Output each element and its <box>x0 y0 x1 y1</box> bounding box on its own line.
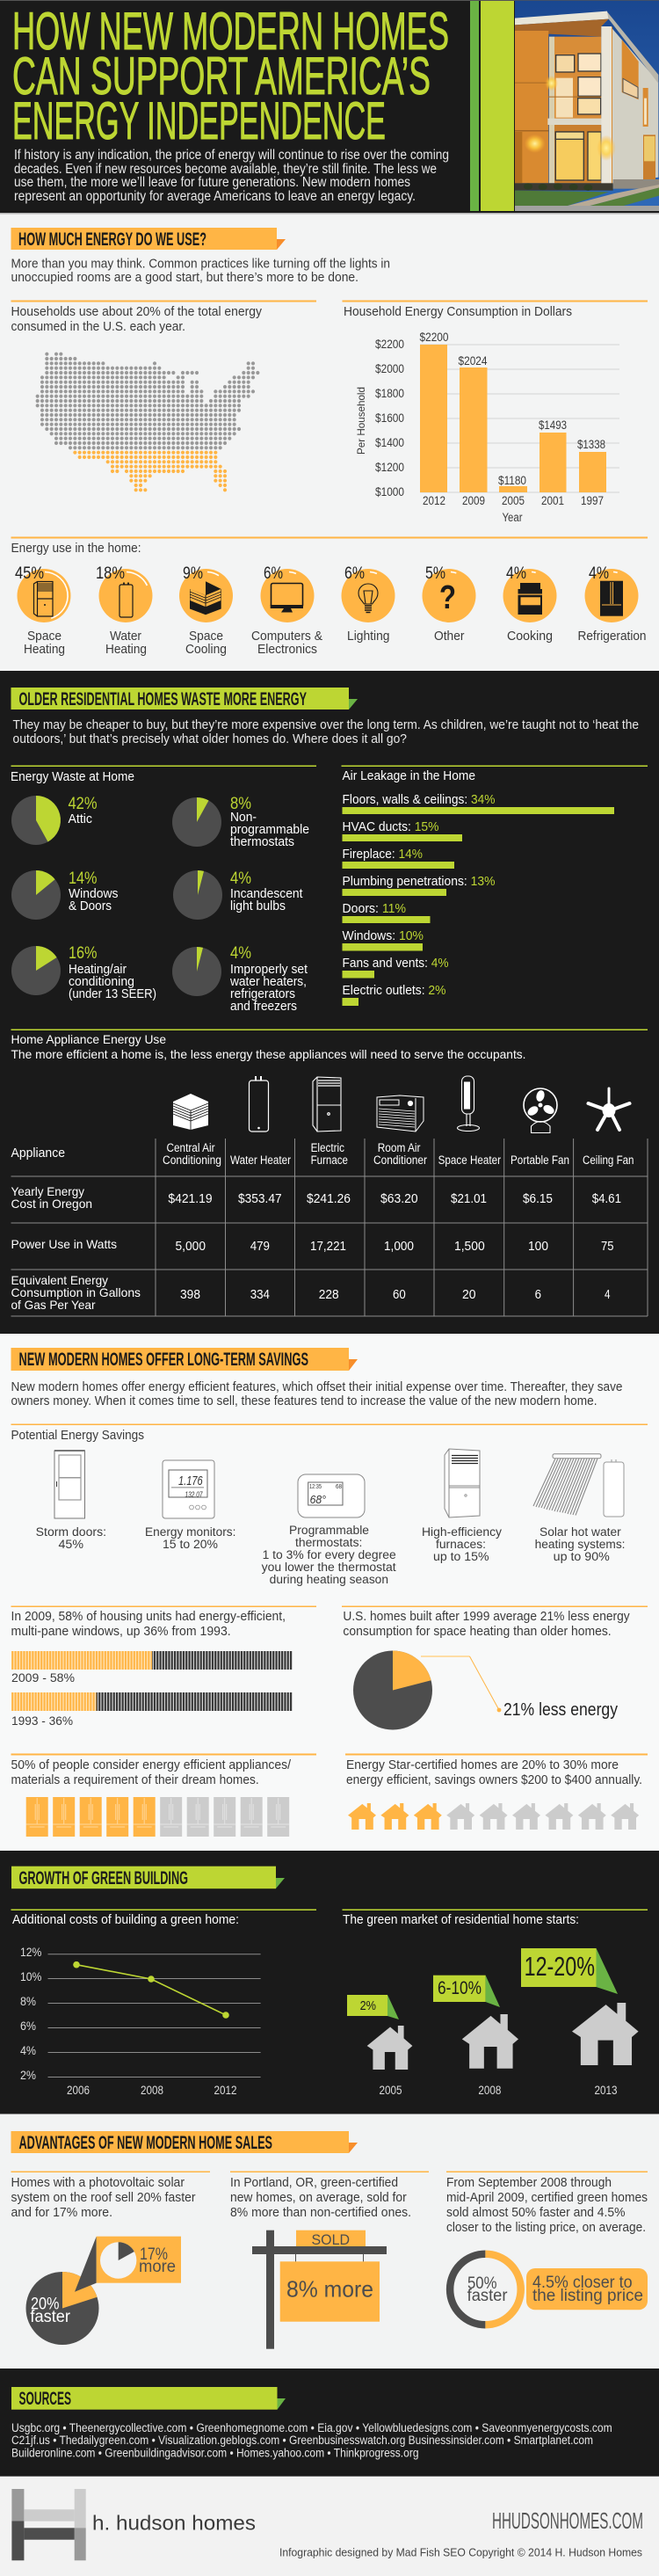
source list <box>11 2421 612 2460</box>
savings item: solar hot water heating: heating systems: <box>535 1538 626 1551</box>
bar chart: household energy consumption: $1200 <box>375 461 404 474</box>
pie: water heaters and refrigerators 4%: 4% <box>230 944 251 963</box>
pie: attic 42%: Attic <box>69 812 92 826</box>
savings item: energy monitors: 1.176 <box>178 1474 203 1488</box>
column: photovoltaic solar homes: and for 17% more. <box>11 2206 112 2220</box>
table: appliance energy use: 20 <box>462 1288 476 1302</box>
pie: thermostats 8%: programmable <box>230 823 309 837</box>
intro paragraph <box>12 718 639 746</box>
column: certified green homes: closer to the listing price, on average. <box>446 2221 646 2235</box>
energy waste pies <box>11 795 309 1014</box>
table: appliance energy use: Cost in Oregon <box>11 1197 92 1211</box>
bar chart: air leakage: Doors: 11% <box>343 902 406 916</box>
heading: air leakage in the home: Air Leakage in the Home <box>343 769 475 783</box>
bar chart: household energy consumption: Year <box>503 511 523 524</box>
item: computers and electronics 6%: 6% <box>264 564 283 583</box>
table: appliance energy use: Ceiling Fan <box>583 1153 634 1167</box>
table: appliance energy use: Water Heater <box>230 1153 291 1167</box>
item: refrigeration 4% <box>578 564 647 644</box>
house: 2005 2%: 2% <box>360 1998 376 2013</box>
bar chart: household energy consumption: 2012 <box>423 494 445 507</box>
pie: windows and doors 14%: & Doors <box>69 899 112 913</box>
table: appliance energy use: 6 <box>535 1288 541 1302</box>
bar chart: household energy consumption: $1800 <box>375 387 404 400</box>
house: 2013 12-20% <box>521 1948 639 2097</box>
savings item: programmable thermostats <box>262 1474 396 1586</box>
heading: households use <box>11 305 263 334</box>
stat: efficient windows: multi-pane windows, up 36% from 1993. <box>11 1625 231 1639</box>
bar chart: household energy consumption: $2024 <box>459 354 488 367</box>
item: refrigeration 4%: Refrigeration <box>578 629 647 644</box>
line chart: additional costs <box>20 1946 261 2097</box>
item: cooking 4%: 4% <box>506 564 526 583</box>
table: appliance energy use: 5,000 <box>176 1240 206 1254</box>
table: appliance energy use: Conditioning <box>163 1153 221 1167</box>
intro paragraph: More than you may think. Common practices like turning off the lights in <box>11 257 390 271</box>
bar chart: household energy consumption <box>355 331 619 524</box>
column: Portland green-certified homes: 8% more than non-certified ones. <box>230 2206 411 2220</box>
item: space heating 45%: 45% <box>15 564 44 583</box>
savings item: solar hot water heating: up to 90% <box>554 1550 610 1563</box>
table: appliance energy use: 100 <box>528 1240 548 1254</box>
panel: growth of green building <box>0 1851 659 2114</box>
bar chart: household energy consumption: 2009 <box>462 494 485 507</box>
table: appliance energy use: 228 <box>319 1288 339 1302</box>
logo: H mark <box>11 2489 86 2560</box>
panel: sources <box>0 2369 659 2476</box>
table: appliance energy use: 60 <box>393 1288 406 1302</box>
heading: potential energy savings: Potential Energy Savings <box>11 1429 144 1443</box>
item: other 5% <box>422 564 476 644</box>
heading: home appliance energy use: Home Appliance Energy Use <box>11 1033 166 1046</box>
column: photovoltaic solar homes: system on the roof sell 20% faster <box>11 2191 196 2205</box>
icon row: houses <box>348 1803 639 1830</box>
table: appliance energy use: Electric <box>311 1141 344 1154</box>
pie: light bulbs 4%: Incandescent <box>230 887 302 901</box>
table: appliance energy use: 4 <box>605 1288 610 1302</box>
appliance icons <box>173 1076 629 1132</box>
stat: efficient appliances <box>11 1758 292 1837</box>
stat: efficient windows: In 2009, 58% of housing units had energy-efficient, <box>11 1610 286 1624</box>
item: water heating 18%: Heating <box>105 643 147 657</box>
heading: home appliance energy use <box>11 1033 525 1061</box>
house: 2005 2%: 2005 <box>380 2084 402 2097</box>
bar chart: air leakage <box>343 793 614 1006</box>
intro paragraph: owners money. When it comes time to sell, these features tend to increase the value of the new modern home. <box>11 1394 597 1408</box>
line chart: additional costs: 4% <box>20 2044 36 2057</box>
energy use icons row <box>15 564 647 657</box>
heading: households use: Households use about 20% of the total energy <box>11 305 263 319</box>
column: certified green homes <box>446 2176 648 2325</box>
bar chart: household energy consumption: $1000 <box>375 485 404 498</box>
item: water heating 18% <box>96 564 153 657</box>
pie: heating and air conditioning 16%: (under 13 SEER) <box>69 987 156 1001</box>
savings item: solar hot water heating: Solar hot water <box>540 1525 621 1539</box>
savings item: programmable thermostats: Programmable <box>289 1524 369 1537</box>
icon: ceiling fan <box>589 1088 629 1130</box>
table: appliance energy use: Yearly Energy <box>11 1184 84 1198</box>
heading: households use: consumed in the U.S. each year. <box>11 320 185 334</box>
pie: heating and air conditioning 16%: Heating/air <box>69 963 127 977</box>
pie callout: 20% faster, 17% more <box>26 2237 181 2345</box>
table: appliance energy use: Portable Fan <box>511 1153 569 1167</box>
stat: efficient windows: 2009 - 58% <box>11 1671 75 1685</box>
callout: 4.5% closer to the listing price <box>526 2268 648 2310</box>
pie: light bulbs 4% <box>173 870 302 920</box>
savings item: programmable thermostats: 68 <box>336 1484 342 1490</box>
table: appliance energy use: $421.19 <box>168 1192 213 1206</box>
item: space heating 45%: Heating <box>24 643 65 657</box>
intro paragraph: They may be cheaper to buy, but they’re more expensive over the long term. As children, we’re taught not to ‘heat the <box>12 718 639 732</box>
section banner: sources <box>11 2387 286 2410</box>
stat: 21% less energy: 21% less energy <box>503 1700 618 1720</box>
item: computers and electronics 6% <box>251 564 322 657</box>
pie: heating and air conditioning 16%: 16% <box>69 944 98 963</box>
pie: light bulbs 4%: 4% <box>230 870 251 888</box>
heading: home appliance energy use: The more efficient a home is, the less energy these appliances will need to serve the occupants. <box>11 1047 525 1061</box>
column: Portland green-certified homes: In Portland, OR, green-certified <box>230 2176 398 2190</box>
panel: long-term savings <box>0 1334 659 1851</box>
house: 2008 6-10%: 2008 <box>478 2084 501 2097</box>
house: 2008 6-10%: 6-10% <box>438 1978 482 1998</box>
sold sign <box>252 2230 387 2349</box>
bar chart: household energy consumption: $1338 <box>577 438 605 451</box>
savings item: programmable thermostats: 68° <box>310 1493 326 1506</box>
line chart: additional costs: 10% <box>20 1970 41 1983</box>
item: space heating 45%: Space <box>27 629 62 644</box>
savings item: programmable thermostats: thermostats: <box>295 1536 362 1549</box>
table: appliance energy use: $353.47 <box>238 1192 282 1206</box>
pie: water heaters and refrigerators 4%: water heaters, <box>229 975 307 989</box>
sold sign: SOLD <box>311 2231 350 2248</box>
table: appliance energy use: $21.01 <box>451 1192 487 1206</box>
pie: thermostats 8%: thermostats <box>230 835 294 849</box>
bar chart: air leakage: Plumbing penetrations: 13% <box>343 875 496 889</box>
savings item: programmable thermostats: 12:35 <box>309 1484 322 1490</box>
green market houses <box>347 1948 639 2097</box>
table: appliance energy use: $241.26 <box>307 1192 351 1206</box>
stat: energy star homes: Energy Star-certified homes are 20% to 30% more <box>346 1758 619 1772</box>
table: appliance energy use: Conditioner <box>373 1153 427 1167</box>
bar chart: household energy consumption: 1997 <box>581 494 604 507</box>
house: 2013 12-20%: 2013 <box>594 2084 617 2097</box>
panel: footer <box>0 2476 659 2576</box>
table: appliance energy use <box>11 1139 648 1316</box>
stat: 21% less energy: consumption for space heating than older homes. <box>343 1625 612 1639</box>
item: other 5%: ? <box>439 579 456 616</box>
pie: water heaters and refrigerators 4%: and freezers <box>230 1000 297 1014</box>
icon: space heater <box>457 1076 480 1131</box>
column: photovoltaic solar homes: Homes with a photovoltaic solar <box>11 2176 185 2190</box>
line chart: additional costs: 8% <box>20 1995 36 2008</box>
intro text: If history is any indication, the price of energy will continue to rise over the coming <box>14 148 449 163</box>
title <box>12 2 449 150</box>
pie: windows and doors 14%: Windows <box>69 887 118 901</box>
item: lighting 6% <box>341 564 395 644</box>
intro text: decades. Even if new resources become available, they’re still finite. The less we <box>14 162 437 177</box>
pie: thermostats 8%: Non- <box>230 811 257 825</box>
icon: portable fan <box>524 1088 557 1132</box>
item: computers and electronics 6%: Electronics <box>257 643 317 657</box>
intro text <box>14 148 449 204</box>
bar chart: air leakage: Windows: 10% <box>343 929 424 943</box>
table: appliance energy use: 1,500 <box>454 1240 485 1254</box>
stat: energy star homes: energy efficient, savings owners $200 to $400 annually. <box>346 1773 642 1787</box>
intro paragraph: outdoors,’ but that’s precisely what older homes do. Where does it all go? <box>12 732 407 746</box>
savings item: programmable thermostats: you lower the thermostat <box>262 1561 396 1574</box>
table: appliance energy use: 17,221 <box>310 1240 346 1254</box>
title: ENERGY INDEPENDENCE <box>12 91 386 150</box>
table: appliance energy use: Space Heater <box>438 1153 501 1167</box>
intro paragraph <box>11 257 390 285</box>
bar chart: household energy consumption: 2001 <box>541 494 564 507</box>
item: other 5%: Other <box>434 629 465 644</box>
section banner: advantages: ADVANTAGES OF NEW MODERN HOME SALES <box>19 2132 272 2153</box>
savings item: storm doors: 45% <box>58 1538 83 1551</box>
section banner: green building: GROWTH OF GREEN BUILDING <box>19 1867 188 1888</box>
logo wordmark: h. hudson homes <box>92 2512 256 2535</box>
table: appliance energy use: 398 <box>180 1288 200 1302</box>
callout: 4.5% closer to the listing price: the listing price <box>532 2287 643 2305</box>
section banner: long-term savings: NEW MODERN HOMES OFFER LONG-TERM SAVINGS <box>19 1349 308 1370</box>
heading: energy waste at home: Energy Waste at Home <box>11 770 134 784</box>
savings item: programmable thermostats: 1 to 3% for every degree <box>263 1548 396 1561</box>
stat: efficient appliances: materials a requirement of their dream homes. <box>11 1773 259 1787</box>
icon: room air conditioner <box>377 1095 424 1132</box>
line chart: additional costs: 2% <box>20 2069 36 2082</box>
bar chart: household energy consumption: $2200 <box>420 331 448 344</box>
bar chart: household energy consumption: $1600 <box>375 411 404 425</box>
pie: light bulbs 4%: light bulbs <box>230 899 286 913</box>
item: cooking 4%: Cooking <box>507 629 553 644</box>
ring chart: 50% faster: 50% <box>467 2274 497 2293</box>
panel: header <box>0 0 659 215</box>
table: appliance energy use: 479 <box>250 1240 270 1254</box>
heading: energy use in the home: Energy use in the home: <box>11 542 141 556</box>
pie: water heaters and refrigerators 4%: Improperly set <box>230 963 308 977</box>
table: appliance energy use: Consumption in Gallons <box>11 1285 141 1299</box>
section banner: older homes: OLDER RESIDENTIAL HOMES WASTE MORE ENERGY <box>19 688 307 709</box>
item: lighting 6%: Lighting <box>347 629 390 644</box>
item: space cooling 9%: Space <box>189 629 223 644</box>
stat: energy star homes <box>346 1758 642 1830</box>
bar chart: household energy consumption: $1400 <box>375 436 404 449</box>
savings item: solar hot water heating <box>533 1454 626 1563</box>
savings item: high-efficiency furnaces <box>422 1449 502 1563</box>
column: certified green homes: mid-April 2009, certified green homes <box>446 2191 648 2205</box>
bar chart: household energy consumption: $2200 <box>375 338 404 351</box>
pie: water heaters and refrigerators 4%: refrigerators <box>230 987 295 1001</box>
source list: Builderonline.com • Greenbuildingadvisor.com • Homes.yahoo.com • Thinkprogress.org <box>11 2447 418 2460</box>
bar chart: household energy consumption: 2005 <box>502 494 525 507</box>
table: appliance energy use: 1,000 <box>384 1240 414 1254</box>
stat: efficient windows: 1993 - 36% <box>11 1714 73 1728</box>
bar chart: air leakage: HVAC ducts: 15% <box>343 820 439 834</box>
section banner: long-term savings <box>11 1348 358 1371</box>
savings item: energy monitors: 132.07 <box>185 1490 203 1500</box>
item: cooking 4% <box>503 564 557 644</box>
bar chart: air leakage: Fans and vents: 4% <box>343 957 449 971</box>
house: 2013 12-20%: 12-20% <box>525 1951 595 1982</box>
pie: windows and doors 14% <box>11 870 118 920</box>
stat: 21% less energy: U.S. homes built after 1999 average 21% less energy <box>343 1610 630 1624</box>
table: appliance energy use: $4.61 <box>592 1192 621 1206</box>
green accent stripes <box>470 1 514 211</box>
icon: central air conditioner <box>173 1094 208 1130</box>
intro text: represent an opportunity for average Americans to leave an energy legacy. <box>14 189 416 204</box>
icon row: refrigerators <box>26 1797 289 1837</box>
heading: additional costs: Additional costs of building a green home: <box>12 1913 239 1927</box>
sold sign: 8% more <box>286 2276 373 2303</box>
section banner: sources: SOURCES <box>19 2388 71 2409</box>
pie: water heaters and refrigerators 4% <box>172 944 308 1014</box>
item: water heating 18%: 18% <box>96 564 125 583</box>
item: lighting 6%: 6% <box>344 564 365 583</box>
intro paragraph: New modern homes offer energy efficient features, which offset their initial expense over time. Thereafter, they save <box>11 1380 622 1394</box>
pie callout: 20% faster, 17% more: more <box>139 2258 176 2276</box>
savings item: high-efficiency furnaces: High-efficiency <box>422 1525 502 1539</box>
pie: thermostats 8%: 8% <box>230 795 251 813</box>
table: appliance energy use: Appliance <box>11 1146 65 1161</box>
line chart: additional costs: 2006 <box>67 2084 90 2097</box>
savings item: programmable thermostats: during heating season <box>270 1573 388 1586</box>
pie: attic 42% <box>11 795 98 845</box>
table: appliance energy use: $6.15 <box>523 1192 553 1206</box>
table: appliance energy use: of Gas Per Year <box>11 1298 96 1312</box>
credits: Infographic designed by Mad Fish SEO Copyright © 2014 H. Hudson Homes <box>279 2546 642 2559</box>
item: space heating 45% <box>15 564 70 657</box>
table: appliance energy use: $63.20 <box>380 1192 418 1206</box>
bar chart: household energy consumption: $1180 <box>498 474 526 487</box>
savings item: energy monitors <box>145 1460 235 1551</box>
house: 2008 6-10% <box>433 1976 518 2097</box>
house: 2005 2% <box>347 1995 412 2097</box>
pie callout: 20% faster, 17% more: 20% <box>31 2296 60 2314</box>
table: appliance energy use: Central Air <box>167 1141 215 1154</box>
line chart: additional costs: 2008 <box>141 2084 163 2097</box>
pie: windows and doors 14%: 14% <box>69 870 98 888</box>
intro paragraph: unoccupied rooms are a good start, but there’s more to be done. <box>11 271 358 285</box>
savings item: storm doors <box>36 1450 106 1551</box>
photo: modern house illustration <box>515 1 659 211</box>
item: other 5%: 5% <box>425 564 445 583</box>
table: appliance energy use: 75 <box>601 1240 613 1254</box>
line chart: additional costs: 2012 <box>214 2084 237 2097</box>
bar chart: household energy consumption: $2000 <box>375 362 404 375</box>
pie: heating and air conditioning 16% <box>11 944 156 1001</box>
stat: efficient appliances: 50% of people consider energy efficient appliances/ <box>11 1758 292 1772</box>
table: appliance energy use: Furnace <box>311 1153 348 1167</box>
icon: water heater <box>250 1076 269 1132</box>
heading: green market: The green market of residential home starts: <box>343 1913 579 1927</box>
intro paragraph <box>11 1380 622 1408</box>
ring chart: 50% faster: faster <box>467 2287 508 2305</box>
dot map of the United States <box>38 354 257 490</box>
table: appliance energy use: Equivalent Energy <box>11 1273 108 1287</box>
bar chart: air leakage: Floors, walls & ceilings: 34% <box>343 793 496 807</box>
table: appliance energy use: Room Air <box>378 1141 421 1154</box>
pie callout: 20% faster, 17% more: faster <box>30 2308 71 2326</box>
table: appliance energy use: 334 <box>250 1288 270 1302</box>
line chart: additional costs: 6% <box>20 2019 36 2033</box>
ring chart: 50% faster <box>450 2254 521 2325</box>
section banner: older homes <box>11 688 358 709</box>
savings item: high-efficiency furnaces: up to 15% <box>433 1550 489 1563</box>
pie: heating and air conditioning 16%: conditioning <box>69 975 134 989</box>
item: refrigeration 4%: 4% <box>589 564 609 583</box>
column: photovoltaic solar homes <box>11 2176 196 2345</box>
intro text: use them, the more we’ll leave for future generations. New modern homes <box>14 175 410 190</box>
stat: efficient windows <box>11 1610 292 1728</box>
section banner: how much energy: HOW MUCH ENERGY DO WE USE? <box>18 229 206 250</box>
bar chart: air leakage: Electric outlets: 2% <box>343 984 446 998</box>
table: appliance energy use: Power Use in Watts <box>11 1237 117 1251</box>
item: space cooling 9% <box>179 564 233 657</box>
bar chart: household energy consumption: $1493 <box>539 418 567 432</box>
pie: thermostats 8% <box>172 795 309 849</box>
savings item: storm doors: Storm doors: <box>36 1525 106 1539</box>
panel: advantages of new modern home sales <box>0 2114 659 2369</box>
panel: older homes waste more energy <box>0 671 659 1334</box>
bar chart: air leakage: Fireplace: 14% <box>343 848 423 862</box>
line chart: additional costs: 12% <box>20 1946 41 1959</box>
item: water heating 18%: Water <box>110 629 141 644</box>
bar chart: household energy consumption: Per Household <box>355 387 367 455</box>
panel: how much energy <box>0 215 659 671</box>
icon: electric furnace <box>313 1077 341 1132</box>
savings item: energy monitors: 15 to 20% <box>163 1538 218 1551</box>
pie: attic 42%: 42% <box>69 795 98 813</box>
column: Portland green-certified homes <box>230 2176 411 2349</box>
item: space cooling 9%: Cooling <box>185 643 227 657</box>
heading: household energy consumption: Household Energy Consumption in Dollars <box>344 305 572 319</box>
savings item: high-efficiency furnaces: furnaces: <box>436 1538 486 1551</box>
column: certified green homes: sold almost 50% faster and 4.5% <box>446 2206 626 2220</box>
item: space cooling 9%: 9% <box>183 564 203 583</box>
item: computers and electronics 6%: Computers & <box>251 629 322 644</box>
stat: 21% less energy <box>343 1610 630 1730</box>
pie callout: 20% faster, 17% more: 17% <box>140 2245 168 2264</box>
callout: 4.5% closer to the listing price: 4.5% closer to <box>532 2274 633 2292</box>
savings item: energy monitors: Energy monitors: <box>145 1525 235 1539</box>
column: Portland green-certified homes: new homes, on average, sold for <box>230 2191 407 2205</box>
source list: C21jf.us • Thedailygreen.com • Visualization.geblogs.com • Greenbusinesswatch.org Businessinsider.com • Smartplanet.com <box>11 2434 593 2447</box>
column: certified green homes: From September 2008 through <box>446 2176 612 2190</box>
